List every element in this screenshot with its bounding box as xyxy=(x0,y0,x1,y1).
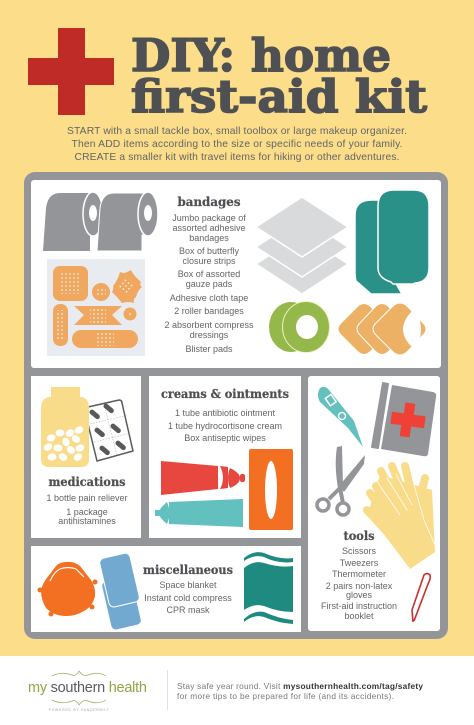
tools list: Thermometer xyxy=(332,569,386,579)
bandages list: 2 roller bandages xyxy=(174,306,244,316)
icon: tweezers xyxy=(412,574,430,622)
bandages list xyxy=(164,213,254,354)
miscellaneous list: Instant cold compress xyxy=(144,593,232,603)
icon: antiseptic wipes box xyxy=(249,449,293,530)
bandages list: Box of assorted xyxy=(178,269,240,279)
footer divider xyxy=(166,670,169,710)
icon: red cross xyxy=(28,28,114,115)
kit box frame xyxy=(24,172,448,639)
medications list: antihistamines xyxy=(58,516,116,526)
tools list: 2 pairs non-latex xyxy=(326,581,393,591)
medications list: 1 package xyxy=(66,507,108,517)
panel: creams and ointments xyxy=(149,376,301,538)
medications list xyxy=(46,493,128,526)
bandages list: assorted adhesive xyxy=(172,223,246,233)
intro text: Then ADD items according to the size or specific needs of your family. xyxy=(72,139,402,150)
bandages list: Jumbo package of xyxy=(172,213,246,223)
icon: thermometer xyxy=(318,387,363,447)
heading: bandages: bandages xyxy=(178,195,241,209)
logo xyxy=(28,671,147,712)
icon: gloves xyxy=(367,466,435,569)
tools list: Scissors xyxy=(342,546,376,556)
creams list: 1 tube antibiotic ointment xyxy=(175,408,276,418)
icon: pill bottle xyxy=(41,387,89,467)
tools list: Tweezers xyxy=(340,558,379,568)
intro text: CREATE a smaller kit with travel items for hiking or other adventures. xyxy=(74,152,400,163)
bandages list: Box of butterfly xyxy=(179,246,240,256)
miscellaneous list: Space blanket xyxy=(159,580,217,590)
icon: CPR mask xyxy=(38,562,98,616)
creams list: Box antiseptic wipes xyxy=(184,433,266,443)
footer xyxy=(0,656,474,725)
icon: adhesive bandages xyxy=(47,259,145,356)
bandages list: dressings xyxy=(190,330,229,340)
icon: compress dressings xyxy=(355,190,429,294)
footer text: for more tips to be prepared for life (and its accidents). xyxy=(177,691,394,701)
icon: red ointment tube xyxy=(161,461,245,495)
icon: space blanket xyxy=(244,552,293,624)
medications list: 1 bottle pain reliever xyxy=(46,493,128,503)
panel: miscellaneous xyxy=(31,546,301,632)
title: first-aid kit xyxy=(131,70,427,123)
logo: my southern health xyxy=(28,680,147,696)
title: DIY: home xyxy=(131,29,391,82)
bandages list: gauze pads xyxy=(186,279,233,289)
bandages list: Adhesive cloth tape xyxy=(170,293,248,303)
heading: miscellaneous: miscellaneous xyxy=(143,563,233,577)
title xyxy=(131,29,427,123)
panel: tools xyxy=(308,376,440,631)
icon: teal cream tube xyxy=(155,499,243,527)
heading: tools: tools xyxy=(344,529,375,543)
icon: scissors xyxy=(317,446,365,515)
icon: blister pack xyxy=(87,400,133,461)
miscellaneous list: CPR mask xyxy=(166,605,210,615)
footer text xyxy=(177,681,423,701)
icon: cold compress xyxy=(99,552,142,631)
icon: gauze pads xyxy=(256,197,348,294)
intro text: START with a small tackle box, small toolbox or large makeup organizer. xyxy=(67,126,407,137)
bandages list: closure strips xyxy=(182,256,236,266)
creams list: 1 tube hydrocortisone cream xyxy=(168,421,282,431)
bandages list: 2 absorbent compress xyxy=(164,320,254,330)
panel: bandages xyxy=(31,180,441,368)
tools list: First-aid instruction xyxy=(321,601,397,611)
intro text xyxy=(67,126,407,163)
heading: medications: medications xyxy=(48,475,126,489)
footer text: Stay safe year round. Visit mysouthernhealth.com/tag/safety xyxy=(177,681,423,691)
icon: gauze rolls xyxy=(43,192,158,251)
bandages list: bandages xyxy=(189,233,229,243)
logo: POWERED BY VANDERBILT xyxy=(49,708,110,712)
miscellaneous list xyxy=(144,580,232,615)
icon: roller bandage xyxy=(269,302,330,352)
heading: creams and ointments: creams & ointments xyxy=(161,387,289,401)
tools list: booklet xyxy=(344,611,374,621)
tools list xyxy=(321,546,397,621)
panel: medications xyxy=(31,376,141,538)
bandages list: Blister pads xyxy=(185,344,233,354)
icon: blister pads xyxy=(338,303,426,355)
creams list xyxy=(168,408,282,443)
icon: first-aid booklet xyxy=(372,383,436,456)
tools list: gloves xyxy=(346,590,373,600)
